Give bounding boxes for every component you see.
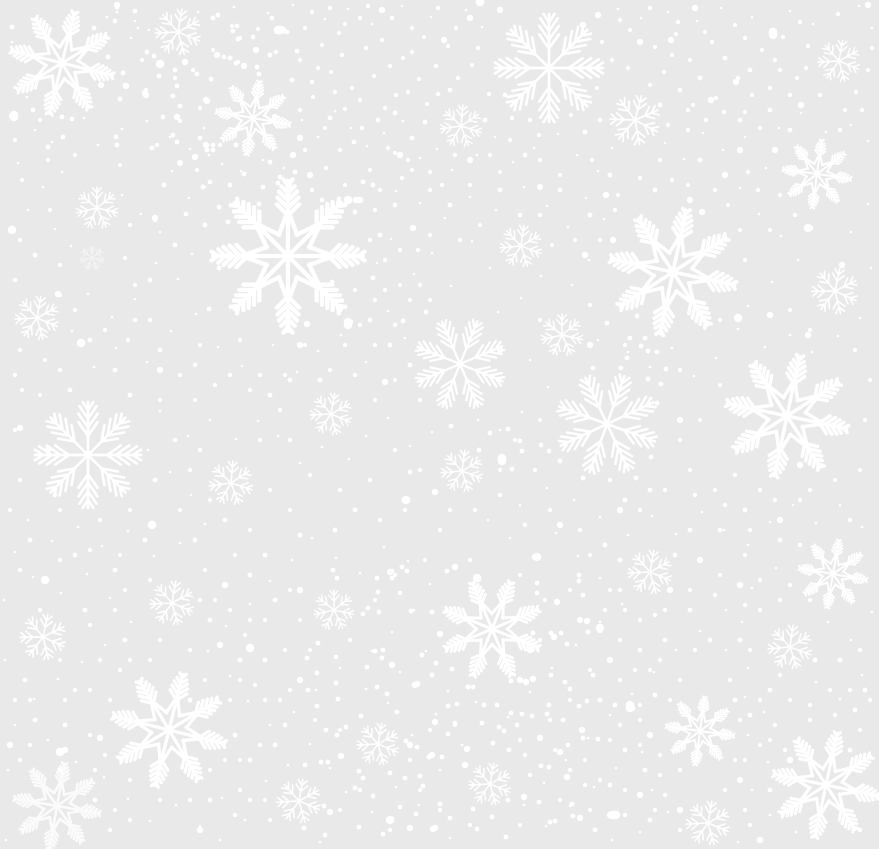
snowflake 23 (438, 447, 486, 495)
snowflake 31 (99, 660, 239, 800)
snowflake 14 (807, 264, 863, 319)
snowflake 17 (540, 314, 584, 356)
snowflake 37 (273, 775, 325, 827)
snowflake 19 (713, 342, 861, 490)
snowflake 10 (80, 246, 104, 270)
snowflake 29 (426, 563, 558, 695)
snowflake 35 (465, 760, 515, 809)
snowflake 24 (624, 546, 676, 598)
snowflake 18 (542, 359, 672, 489)
snowflake 7 (603, 89, 666, 151)
snowflake 30 (764, 622, 816, 672)
snowflake 1 (0, 0, 126, 127)
snowflake 22 (206, 459, 256, 507)
snowflake 20 (306, 390, 356, 439)
snowflake 25 (793, 534, 873, 614)
snowflake 4 (495, 14, 603, 122)
snowflake 8 (778, 135, 856, 213)
snowflake 26 (146, 577, 198, 629)
snowflake 36 (6, 755, 108, 849)
snowflake 5 (814, 37, 864, 86)
snowflake 27 (313, 590, 355, 630)
snowflake 38 (682, 797, 734, 849)
snowflake 16 (400, 304, 520, 424)
snowflake 12 (497, 222, 545, 270)
snowflake 33 (661, 692, 739, 770)
snowflake 15 (11, 292, 63, 344)
snowflake 21 (35, 402, 141, 508)
snowflake 34 (762, 721, 879, 849)
snowflake 32 (353, 720, 403, 769)
snowflake 28 (15, 610, 71, 665)
snowflake 13 (597, 196, 749, 348)
snowflake 9 (75, 187, 119, 229)
snowflake 3 (209, 74, 297, 162)
snowflake 6 (438, 103, 484, 149)
snowflake 11 (212, 180, 364, 332)
snowflake 2 (151, 5, 205, 59)
